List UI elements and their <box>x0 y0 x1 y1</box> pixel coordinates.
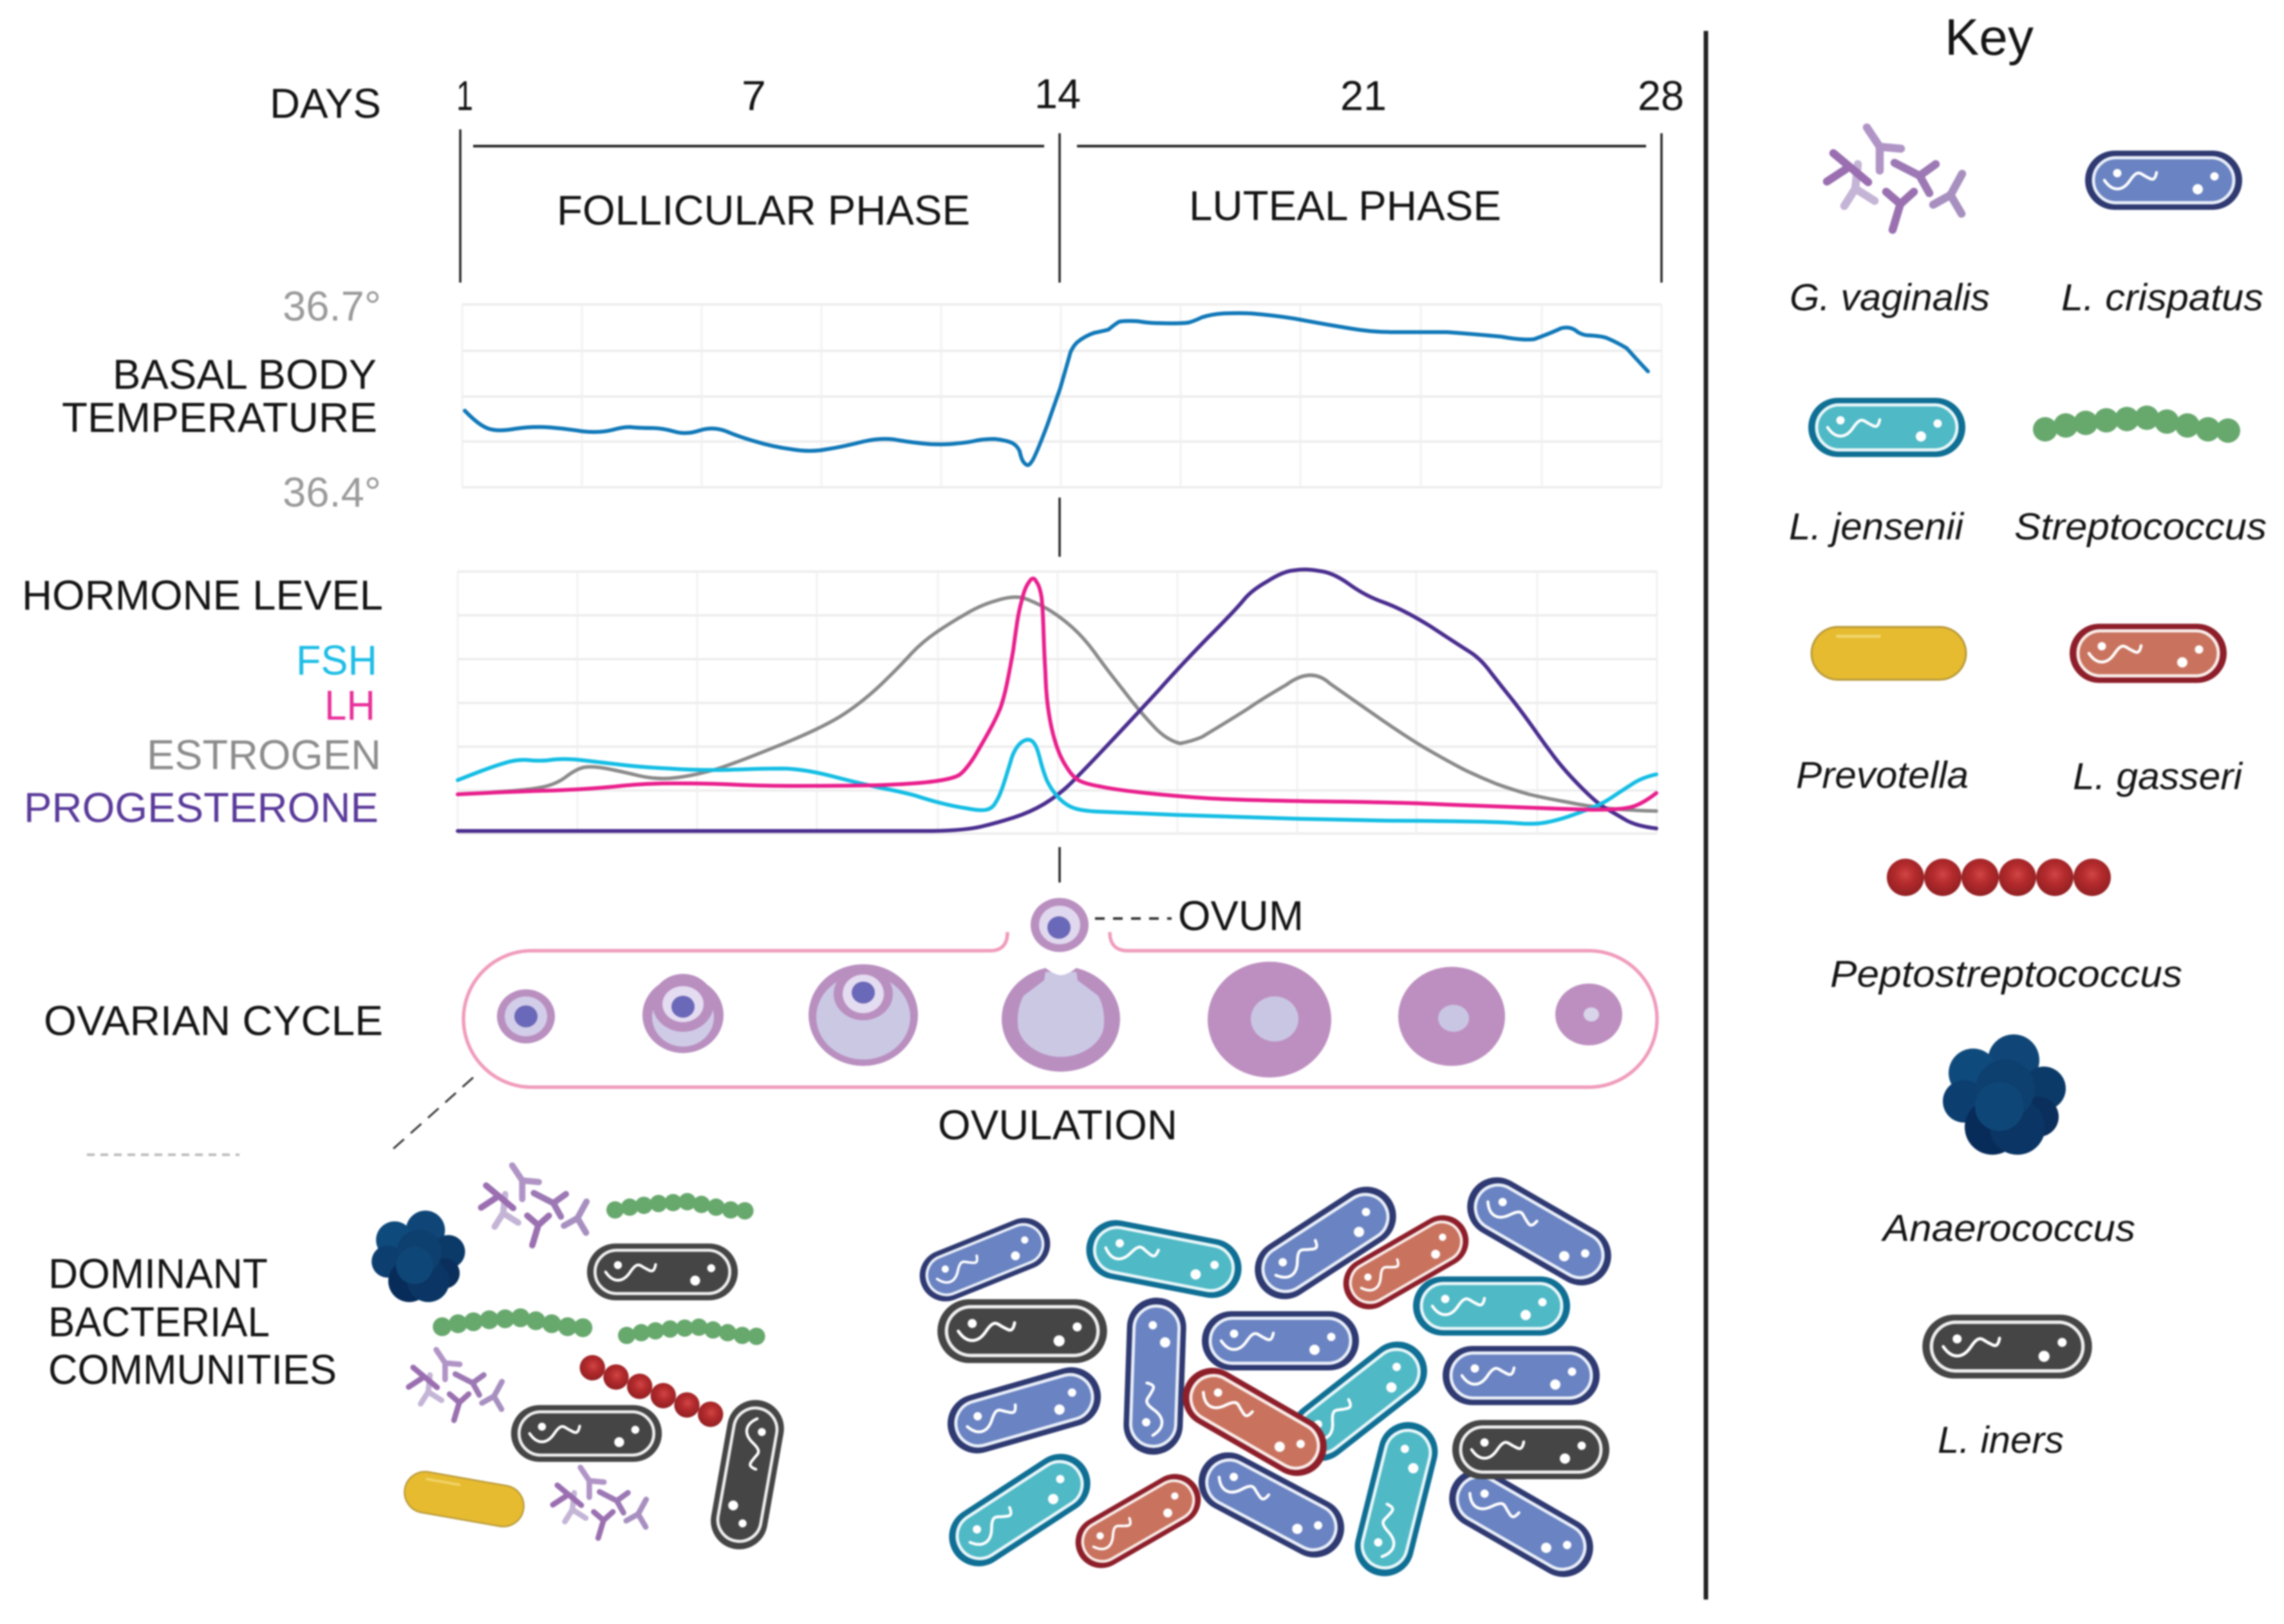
legend progesterone: PROGESTERONE <box>24 784 379 831</box>
label: L. crispatus: L. crispatus <box>2061 277 2263 319</box>
label: L. iners: L. iners <box>1938 1419 2064 1461</box>
follicular phase label: FOLLICULAR PHASE <box>557 187 970 234</box>
ovum leader line <box>1095 917 1172 920</box>
bacterial community: diverse <box>371 1166 789 1554</box>
label: Anaerococcus: Anaerococcus <box>1881 1208 2135 1249</box>
luteal phase label: LUTEAL PHASE <box>1189 182 1501 229</box>
day 21: 21 <box>1340 72 1387 119</box>
label: L. jensenii: L. jensenii <box>1789 506 1965 548</box>
chart: basal body temperature <box>462 304 1662 487</box>
label: Prevotella: Prevotella <box>1796 754 1969 796</box>
phase brackets <box>460 129 1662 283</box>
hormone level heading: HORMONE LEVEL <box>22 572 383 619</box>
icon: Anaerococcus <box>1943 1034 2066 1155</box>
icon: L. jensenii <box>1808 398 1965 457</box>
icon: L. iners <box>1922 1314 2092 1379</box>
ovulation label: OVULATION <box>938 1101 1177 1148</box>
hormone labels <box>22 572 383 831</box>
icon: L. gasseri <box>2070 624 2227 683</box>
icon: Peptostreptococcus <box>1887 859 2111 896</box>
days axis <box>270 70 1684 127</box>
upper temperature value: 36.7° <box>283 283 381 330</box>
ovary outline <box>463 932 1657 1087</box>
icon: Prevotella <box>1811 627 1966 680</box>
legend estrogen: ESTROGEN <box>147 731 381 778</box>
dominant bacterial communities heading: COMMUNITIES <box>48 1346 337 1393</box>
dashed divider <box>87 1153 239 1156</box>
follicle 4: ovulating <box>1002 962 1120 1072</box>
chart: hormone levels <box>458 570 1657 834</box>
temperature axis labels <box>62 283 381 516</box>
corpus luteum 3 <box>1555 984 1622 1045</box>
basal body temperature heading line 2: TEMPERATURE <box>62 394 377 441</box>
corpus luteum 1 <box>1208 962 1331 1078</box>
label: Peptostreptococcus: Peptostreptococcus <box>1830 953 2182 995</box>
dominant bacterial communities heading <box>48 1250 337 1393</box>
day 28: 28 <box>1638 72 1684 119</box>
FSH curve <box>458 740 1656 824</box>
basal body temperature heading: BASAL BODY <box>113 351 377 398</box>
key panel <box>1789 8 2267 1461</box>
lower temperature value: 36.4° <box>283 469 381 516</box>
key title: Key <box>1945 8 2034 66</box>
key divider <box>1703 31 1708 1600</box>
dashed leader to bacterial communities <box>389 1078 473 1152</box>
follicle 1 <box>497 989 555 1043</box>
ovum <box>1031 898 1089 952</box>
temperature curve <box>465 313 1648 465</box>
day 14 connector lower <box>1058 847 1061 882</box>
day 14 connector upper <box>1058 498 1061 557</box>
ovarian cycle panel <box>463 932 1657 1087</box>
day 7: 7 <box>742 72 766 119</box>
dominant bacterial communities heading: BACTERIAL <box>48 1298 270 1345</box>
LH curve <box>458 579 1656 810</box>
day 14: 14 <box>1034 70 1081 117</box>
bacterial community: lactobacillus dominated <box>912 1166 1622 1588</box>
day 1: 1 <box>456 72 473 119</box>
icon: G. vaginalis <box>1827 127 1962 230</box>
days heading: DAYS <box>270 80 381 127</box>
label: L. gasseri: L. gasseri <box>2073 756 2243 798</box>
label: G. vaginalis: G. vaginalis <box>1790 277 1990 319</box>
follicle 3 <box>809 964 918 1066</box>
corpus luteum 2 <box>1398 967 1505 1066</box>
legend LH: LH <box>324 682 375 729</box>
ovarian cycle heading: OVARIAN CYCLE <box>44 997 383 1044</box>
label: Streptococcus: Streptococcus <box>2014 506 2267 548</box>
legend FSH: FSH <box>296 637 377 684</box>
ovum label: OVUM <box>1178 892 1304 939</box>
dominant bacterial communities heading: DOMINANT <box>48 1250 268 1297</box>
icon: L. crispatus <box>2085 151 2242 210</box>
progesterone curve <box>458 570 1656 831</box>
icon: Streptococcus <box>2033 406 2240 443</box>
estrogen curve <box>458 597 1656 811</box>
follicle 2 <box>642 974 724 1053</box>
